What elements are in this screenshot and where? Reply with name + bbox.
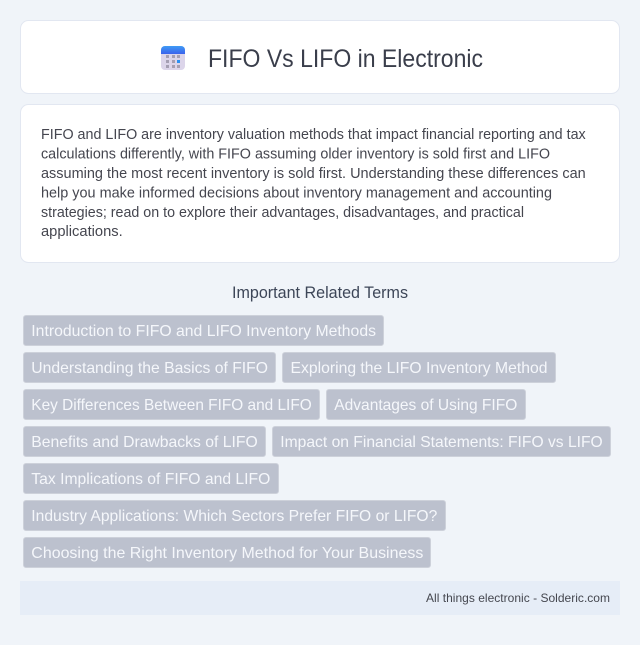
panel: intro paragraph: strategies; read on to explore their advantages, disadvantages, and practical: [41, 205, 524, 221]
panel: intro paragraph: applications.: [41, 224, 123, 240]
icon: calendar: [161, 46, 185, 70]
tag: advantages: [326, 390, 526, 420]
tag: benefits: [24, 426, 266, 456]
footer: All things electronic - Solderic.com: [426, 591, 610, 605]
panel: intro paragraph: [20, 104, 620, 262]
tag: financial statements: [272, 426, 610, 456]
tag: tax implications: [24, 464, 278, 494]
tag: basics of FIFO: [24, 352, 276, 382]
title: FIFO Vs LIFO in Electronic: [208, 45, 483, 73]
tag: LIFO method: Exploring the LIFO Inventory Method: [290, 360, 548, 377]
panel: intro paragraph: calculations differently, with FIFO assuming older inventory is sold first and LIFO: [41, 146, 550, 162]
tag: industry applications: [24, 500, 446, 530]
panel: header: [20, 20, 620, 94]
panel: intro paragraph: FIFO and LIFO are inventory valuation methods that impact financial reporting and tax: [41, 127, 586, 143]
tag: financial statements: Impact on Financial Statements: FIFO vs LIFO: [280, 434, 603, 451]
heading: related terms: Important Related Terms: [232, 284, 408, 302]
tag: benefits: Benefits and Drawbacks of LIFO: [31, 434, 258, 451]
panel: intro paragraph: help you make informed decisions about inventory management and accounting: [41, 186, 552, 202]
tag: industry applications: Industry Applications: Which Sectors Prefer FIFO or LIFO?: [31, 508, 437, 525]
tag: key differences: [24, 390, 320, 420]
tag: tax implications: Tax Implications of FIFO and LIFO: [31, 471, 270, 488]
tag: basics of FIFO: Understanding the Basics of FIFO: [31, 360, 268, 377]
panel: related term tags: [24, 316, 610, 568]
tag: key differences: Key Differences Between FIFO and LIFO: [31, 397, 312, 414]
panel: intro paragraph: assuming the most recent inventory is sold first. Understanding these differences can: [41, 166, 586, 182]
tag: introduction: Introduction to FIFO and LIFO Inventory Methods: [31, 323, 376, 340]
footer: [20, 581, 620, 615]
tag: LIFO method: [282, 352, 556, 382]
tag: choosing method: [24, 538, 430, 568]
tag: advantages: Advantages of Using FIFO: [334, 397, 517, 414]
tag: choosing method: Choosing the Right Inventory Method for Your Business: [31, 545, 423, 562]
tag: introduction: [24, 316, 384, 346]
